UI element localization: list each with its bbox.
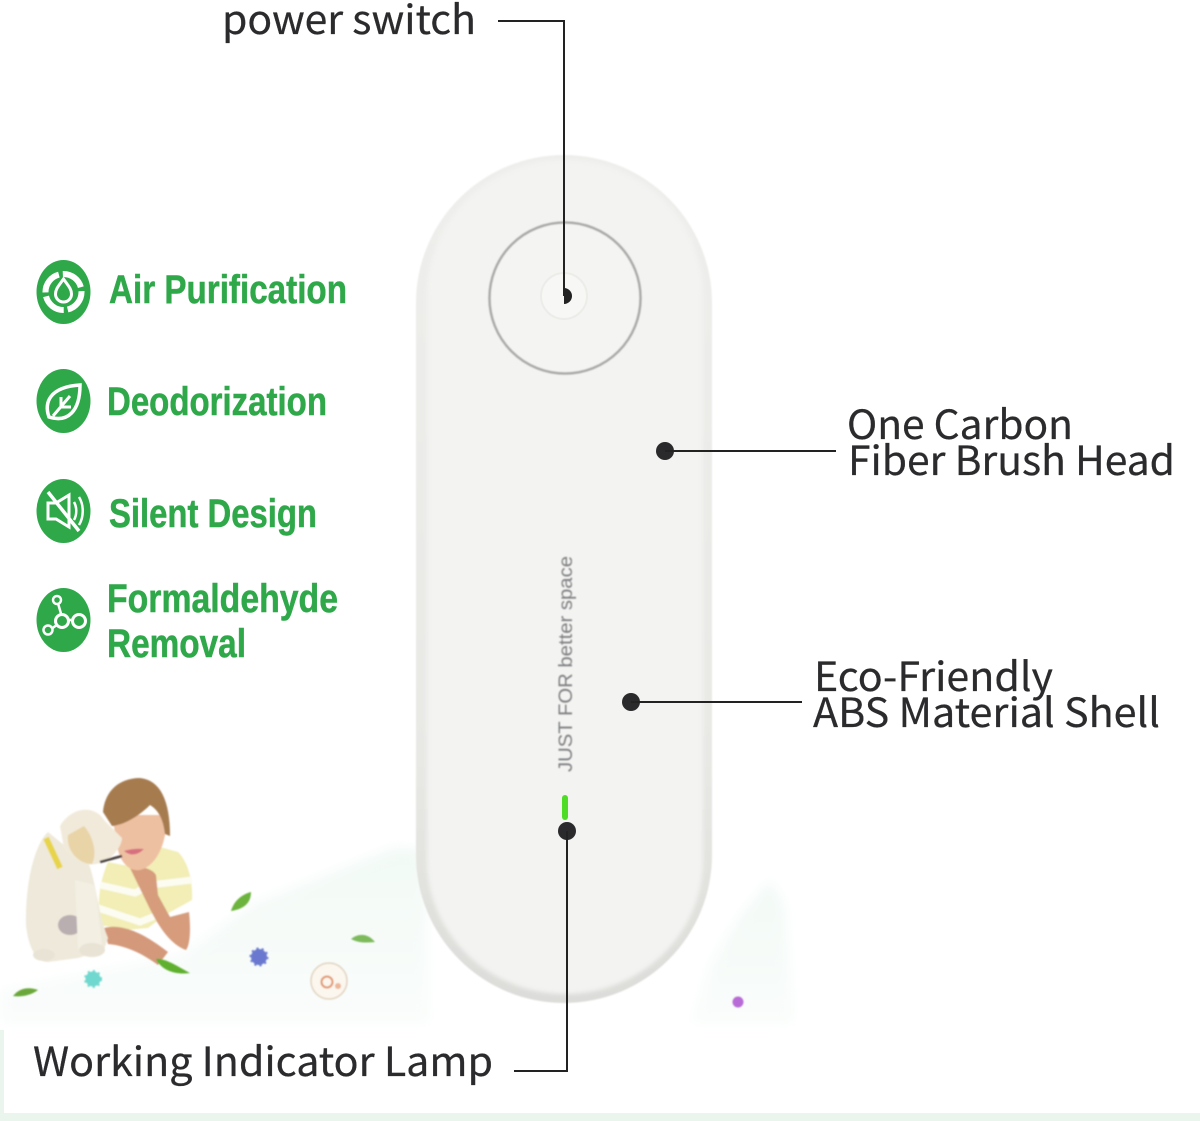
particle: blue virus [251, 949, 267, 965]
dog collar [46, 838, 60, 868]
leaf [351, 935, 375, 943]
icon: muted speaker [36, 479, 90, 543]
dog nose [100, 856, 122, 862]
boy raised arm [130, 867, 190, 950]
boy mouth [124, 849, 144, 855]
feature: deodorization: Deodorization [107, 380, 327, 424]
feature: silent design [36, 479, 317, 543]
callout: ABS shell: Eco-Friendly [814, 645, 1053, 703]
dog ear [68, 826, 94, 864]
callout: carbon fiber brush head: Fiber Brush Head [848, 429, 1175, 487]
callout: carbon fiber brush head [656, 393, 1175, 487]
power button centre [541, 273, 587, 319]
product: white purifier device [416, 155, 712, 1003]
boy hair [103, 778, 170, 836]
feature: silent design: Silent Design [109, 492, 317, 536]
bottom pale green band [0, 1030, 1200, 1121]
callout: carbon fiber brush head: One Carbon [847, 393, 1073, 451]
callout: ABS shell [622, 645, 1160, 739]
icon: leaf [36, 369, 90, 433]
boy shirt [99, 847, 192, 930]
device outer shell [416, 155, 712, 1003]
boy head [112, 815, 166, 870]
mint scenery background [0, 847, 795, 1024]
particle: purple dot [732, 996, 744, 1008]
device front face [427, 160, 703, 994]
green indicator lamp [562, 795, 568, 820]
feature: air purification [36, 260, 347, 324]
callout: ABS shell: ABS Material Shell [813, 681, 1160, 739]
leaf [156, 959, 190, 973]
particle: teal virus [86, 972, 100, 986]
icon: molecule [36, 588, 90, 652]
feature: deodorization [36, 369, 327, 433]
boy lower arm [104, 927, 168, 965]
feature: air purification: Air Purification [109, 268, 347, 312]
dog paws [33, 949, 55, 961]
floating leaves and particles [13, 892, 744, 1008]
callout: power switch [222, 0, 572, 304]
device slogan: JUST FOR better space [556, 556, 577, 772]
icon: water drop in arrows [36, 260, 90, 324]
callout: working indicator lamp: Working Indicator Lamp [33, 1030, 493, 1088]
illustration: dog and boy [26, 778, 192, 965]
dog body [26, 832, 108, 962]
leaf [13, 988, 38, 996]
feature: formaldehyde removal [36, 577, 338, 666]
callout: working indicator lamp [33, 822, 576, 1088]
dog front leg [75, 880, 102, 950]
leaf [231, 892, 251, 911]
power button ring [490, 222, 640, 374]
particle: ozone bubble [311, 963, 347, 999]
dog head [60, 810, 122, 864]
feature: formaldehyde removal: Formaldehyde [107, 577, 338, 621]
dog shadow [58, 915, 82, 935]
feature: formaldehyde removal: Removal [107, 622, 246, 666]
